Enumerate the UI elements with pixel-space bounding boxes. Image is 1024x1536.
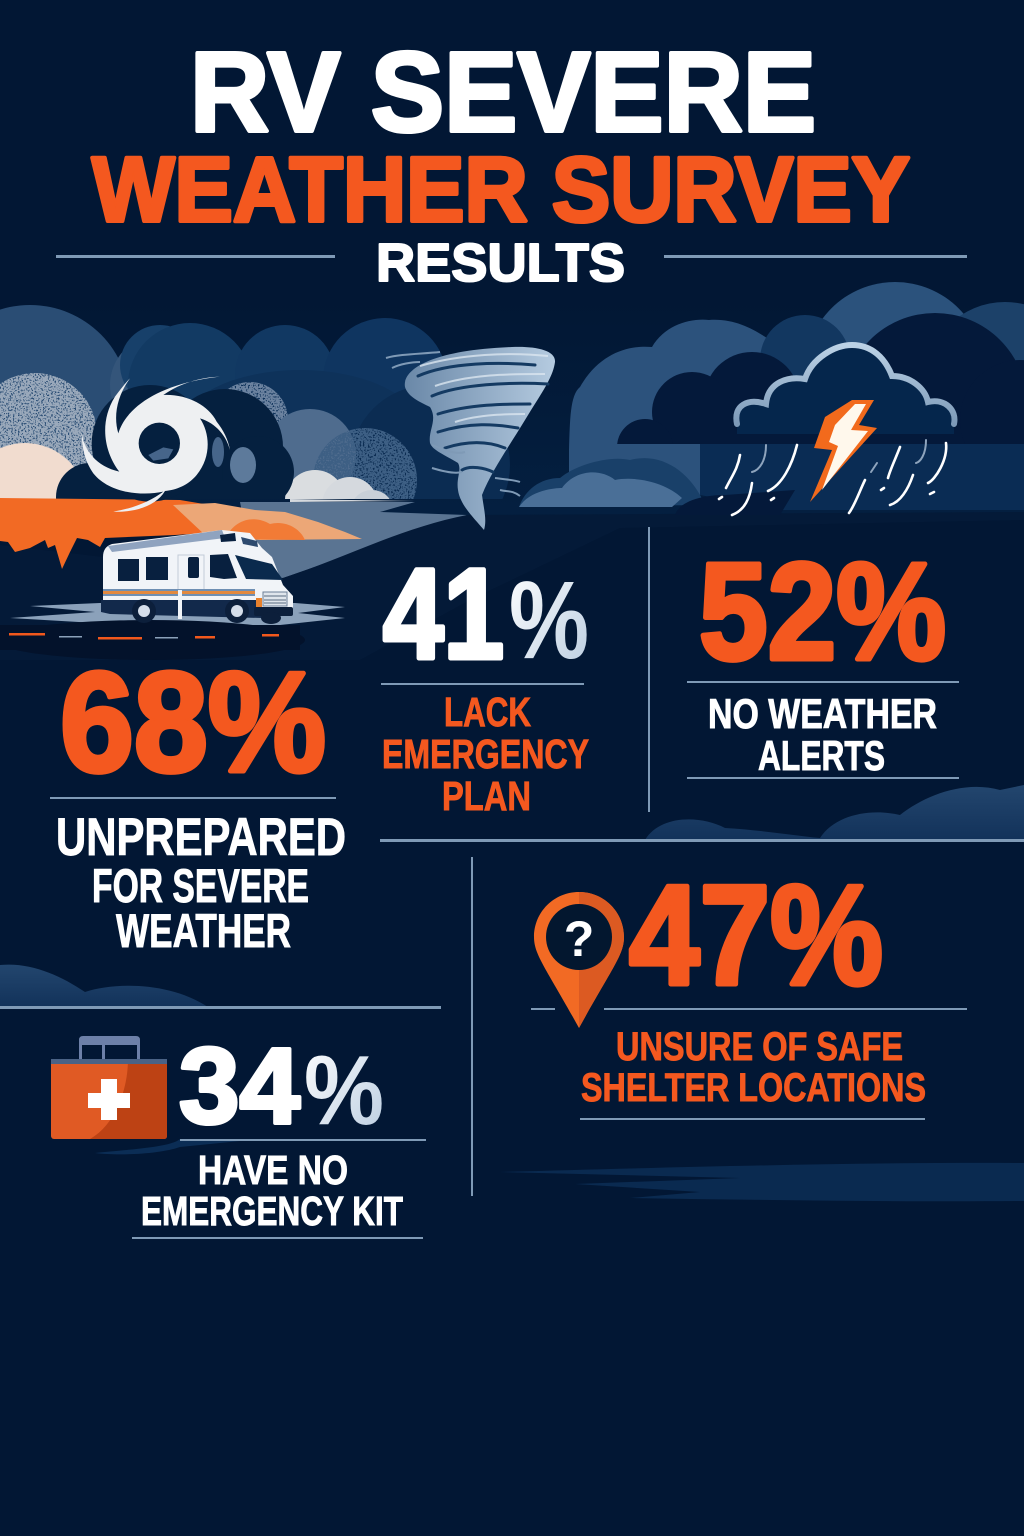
gray land band bbox=[240, 502, 467, 580]
stat: 52% no weather alerts: ALERTS bbox=[758, 732, 885, 779]
vertical divider upper bbox=[648, 527, 650, 812]
stat: 34% no emergency kit: HAVE NO bbox=[198, 1147, 348, 1193]
storm sky illustration bbox=[0, 282, 1024, 578]
icon: storm cloud with lightning bbox=[719, 345, 954, 515]
icon: hurricane bbox=[82, 377, 230, 512]
stat: 68% unprepared: FOR SEVERE bbox=[92, 859, 309, 912]
stat: 47% unsure of shelter: 47% bbox=[629, 856, 883, 1015]
title bbox=[56, 29, 967, 293]
stat: 47% unsure of shelter: UNSURE OF SAFE bbox=[616, 1025, 903, 1069]
stat: 41% lack emergency plan: % bbox=[509, 559, 589, 682]
stat: 68% unprepared: UNPREPARED bbox=[56, 808, 346, 867]
stat: 47% unsure of shelter: SHELTER LOCATIONS bbox=[581, 1066, 926, 1110]
stat: 41% lack emergency plan: EMERGENCY bbox=[382, 731, 589, 777]
stat: 52% no weather alerts: 52% bbox=[699, 535, 946, 689]
stat: 68% unprepared: WEATHER bbox=[116, 904, 291, 957]
stat: 41% lack emergency plan: 41 bbox=[383, 543, 504, 686]
orange horizon band bbox=[0, 498, 250, 569]
title: RESULTS bbox=[376, 233, 625, 293]
stat: 68% unprepared bbox=[50, 643, 346, 957]
icon: location pin with question mark bbox=[534, 892, 624, 1028]
title: WEATHER SURVEY bbox=[92, 139, 910, 241]
stat: 34% no emergency kit bbox=[95, 1025, 426, 1239]
icon: location pin with question mark: ? bbox=[564, 911, 594, 967]
dark hill bbox=[0, 512, 1024, 660]
clouds: right layers bbox=[569, 320, 835, 505]
icon: first aid kit bbox=[51, 1036, 167, 1139]
stat: 41% lack emergency plan: LACK bbox=[444, 689, 531, 735]
lower right band bbox=[700, 444, 1024, 510]
stat: 34% no emergency kit: % bbox=[304, 1035, 384, 1145]
horizontal rule left bbox=[0, 1006, 441, 1009]
stat: 68% unprepared: 68% bbox=[60, 643, 326, 802]
road bbox=[0, 603, 345, 660]
stat: 52% no weather alerts bbox=[687, 535, 959, 779]
icon: tornado bbox=[386, 347, 555, 530]
stat: 41% lack emergency plan bbox=[381, 543, 589, 819]
clouds behind middle rule bbox=[645, 785, 1024, 840]
stat: 34% no emergency kit: EMERGENCY KIT bbox=[141, 1188, 403, 1234]
stat: 52% no weather alerts: NO WEATHER bbox=[708, 690, 937, 737]
swoosh: lower right ground bbox=[500, 1163, 1024, 1201]
stat: 41% lack emergency plan: PLAN bbox=[442, 773, 531, 819]
horizontal rule middle bbox=[380, 839, 1024, 842]
title: RV SEVERE bbox=[190, 29, 816, 155]
stat: 34% no emergency kit: 34 bbox=[179, 1025, 300, 1146]
icon: RV bbox=[101, 530, 293, 624]
clouds on left edge bbox=[0, 965, 208, 1007]
vertical divider lower bbox=[471, 857, 473, 1196]
clouds: upper left layers bbox=[0, 305, 510, 499]
stat: 47% unsure of shelter bbox=[531, 856, 967, 1120]
